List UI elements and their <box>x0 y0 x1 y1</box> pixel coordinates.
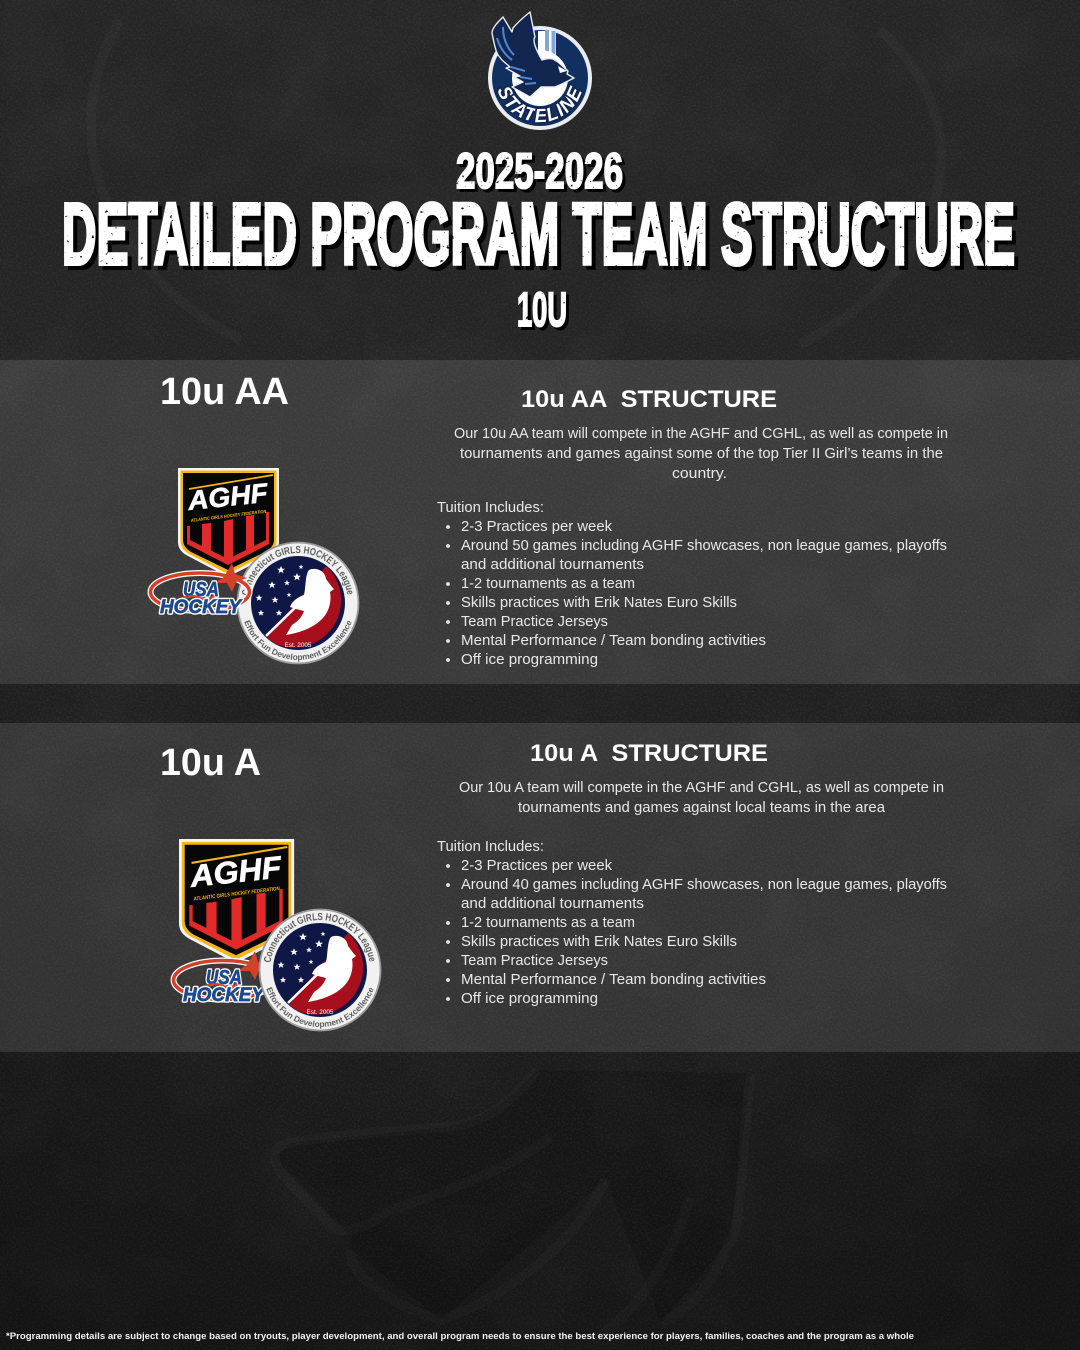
logo: CGHL circle <box>236 542 360 664</box>
title year: 2025-2026: 2025-2026 <box>459 146 626 202</box>
footnote: *Programming details are subject to change based on tryouts, player development, and overall program needs to ensure the best experience for players, families, coaches and the program as a whole <box>6 1331 914 1342</box>
tuition list: 10u A: Tuition Includes: <box>437 839 544 855</box>
heading: 10u A structure: 10u A STRUCTURE <box>530 740 768 767</box>
logo: USA Hockey large: USA <box>206 967 242 989</box>
tuition list: 10u AA: Tuition Includes: <box>437 500 544 516</box>
title year: 2025-2026: 2025-2026 <box>456 143 623 199</box>
age group subtitle: 10U: 10U <box>517 284 567 337</box>
tuition list: 10u A: Off ice programming <box>461 991 598 1007</box>
logo: USA Hockey <box>150 563 250 618</box>
heading: 10u A: 10u A <box>160 742 261 784</box>
intro text: 10u A <box>459 780 944 816</box>
logo: CGHL circle over USA Hockey <box>258 908 382 1032</box>
logo: AGHF shield large <box>179 839 294 963</box>
tuition list: 10u A: 1-2 tournaments as a team <box>461 915 635 931</box>
heading: 10u AA: 10u AA <box>160 371 289 413</box>
intro text: 10u AA: country. <box>672 466 727 482</box>
tuition list: 10u A: Mental Performance / Team bonding activities <box>461 972 766 988</box>
logo: USA Hockey large: USA <box>206 967 242 989</box>
logo: USA Hockey: HOCKEY <box>160 597 243 618</box>
age group subtitle: 10U: 10U <box>520 287 570 340</box>
logo: CGHL circle over USA Hockey: Est. 2005 <box>306 1009 334 1016</box>
logo: AGHF shield large: AGHF <box>188 849 284 894</box>
tuition list: 10u AA: 2-3 Practices per week <box>461 519 613 535</box>
logo: USA Hockey large: HOCKEY <box>183 985 266 1006</box>
logo: USA Hockey: HOCKEY <box>160 597 243 618</box>
logo: Stateline eagle <box>488 11 592 130</box>
logo: USA Hockey large <box>174 951 272 1006</box>
logo: CGHL circle: Est. 2005 <box>284 642 312 649</box>
logo: USA Hockey: USA <box>183 579 219 601</box>
tuition list: 10u A: Team Practice Jerseys <box>461 953 608 969</box>
logo: AGHF shield: AGHF <box>185 478 271 516</box>
logo: CGHL circle over USA Hockey: Connecticut GIRLS HOCKEY League <box>264 912 374 962</box>
logo: USA Hockey: USA <box>183 579 219 601</box>
tuition list: 10u AA: Off ice programming <box>461 652 598 668</box>
tuition list: 10u A <box>437 839 947 1007</box>
tuition list: 10u A: Skills practices with Erik Nates Euro Skills <box>461 934 737 950</box>
logo: Stateline eagle: STATELINE <box>496 82 584 124</box>
tuition list: 10u AA: Team Practice Jerseys <box>461 614 608 630</box>
intro text: 10u A: tournaments and games against local teams in the area <box>518 800 886 816</box>
tuition list: 10u AA: Mental Performance / Team bonding activities <box>461 633 766 649</box>
tuition list: 10u AA <box>437 500 947 668</box>
logo: USA Hockey large: HOCKEY <box>183 985 266 1006</box>
logo group: leagues 10u AA <box>148 468 360 664</box>
tuition list: 10u AA: 1-2 tournaments as a team <box>461 576 635 592</box>
logo: AGHF shield large: ATLANTIC GIRLS HOCKEY FEDERATION <box>192 886 280 903</box>
intro text: 10u AA <box>454 426 948 482</box>
intro text: 10u AA: tournaments and games against some of the top Tier II Girl’s teams in the <box>460 446 943 462</box>
title year: 2025-2026 <box>456 143 626 202</box>
logo: AGHF shield <box>178 468 279 577</box>
panel: 10u AA <box>0 360 1080 684</box>
age group subtitle: 10U <box>517 284 570 340</box>
tuition list: 10u AA: Around 50 games including AGHF showcases, non league games, playoffs <box>461 538 947 554</box>
intro text: 10u A: Our 10u A team will compete in the AGHF and CGHL, as well as compete in <box>459 780 944 796</box>
logo: CGHL circle: Effort Fun Development Excellence <box>244 620 352 662</box>
tuition list: 10u A: Around 40 games including AGHF showcases, non league games, playoffs <box>461 877 947 893</box>
tuition list: 10u A: and additional tournaments <box>461 896 644 912</box>
intro text: 10u AA: Our 10u AA team will compete in the AGHF and CGHL, as well as compete in <box>454 426 948 442</box>
logo: AGHF shield: ATLANTIC GIRLS HOCKEY FEDERATION <box>190 509 267 523</box>
heading: 10u AA structure: 10u AA STRUCTURE <box>521 386 777 413</box>
panel: 10u A <box>0 723 1080 1052</box>
tuition list: 10u AA: and additional tournaments <box>461 557 644 573</box>
logo group: leagues 10u A <box>170 839 382 1032</box>
logo: CGHL circle: Connecticut GIRLS HOCKEY League <box>242 546 352 596</box>
logo: CGHL circle over USA Hockey: Effort Fun Development Excellence <box>266 987 374 1029</box>
tuition list: 10u AA: Skills practices with Erik Nates Euro Skills <box>461 595 737 611</box>
tuition list: 10u A: 2-3 Practices per week <box>461 858 613 874</box>
